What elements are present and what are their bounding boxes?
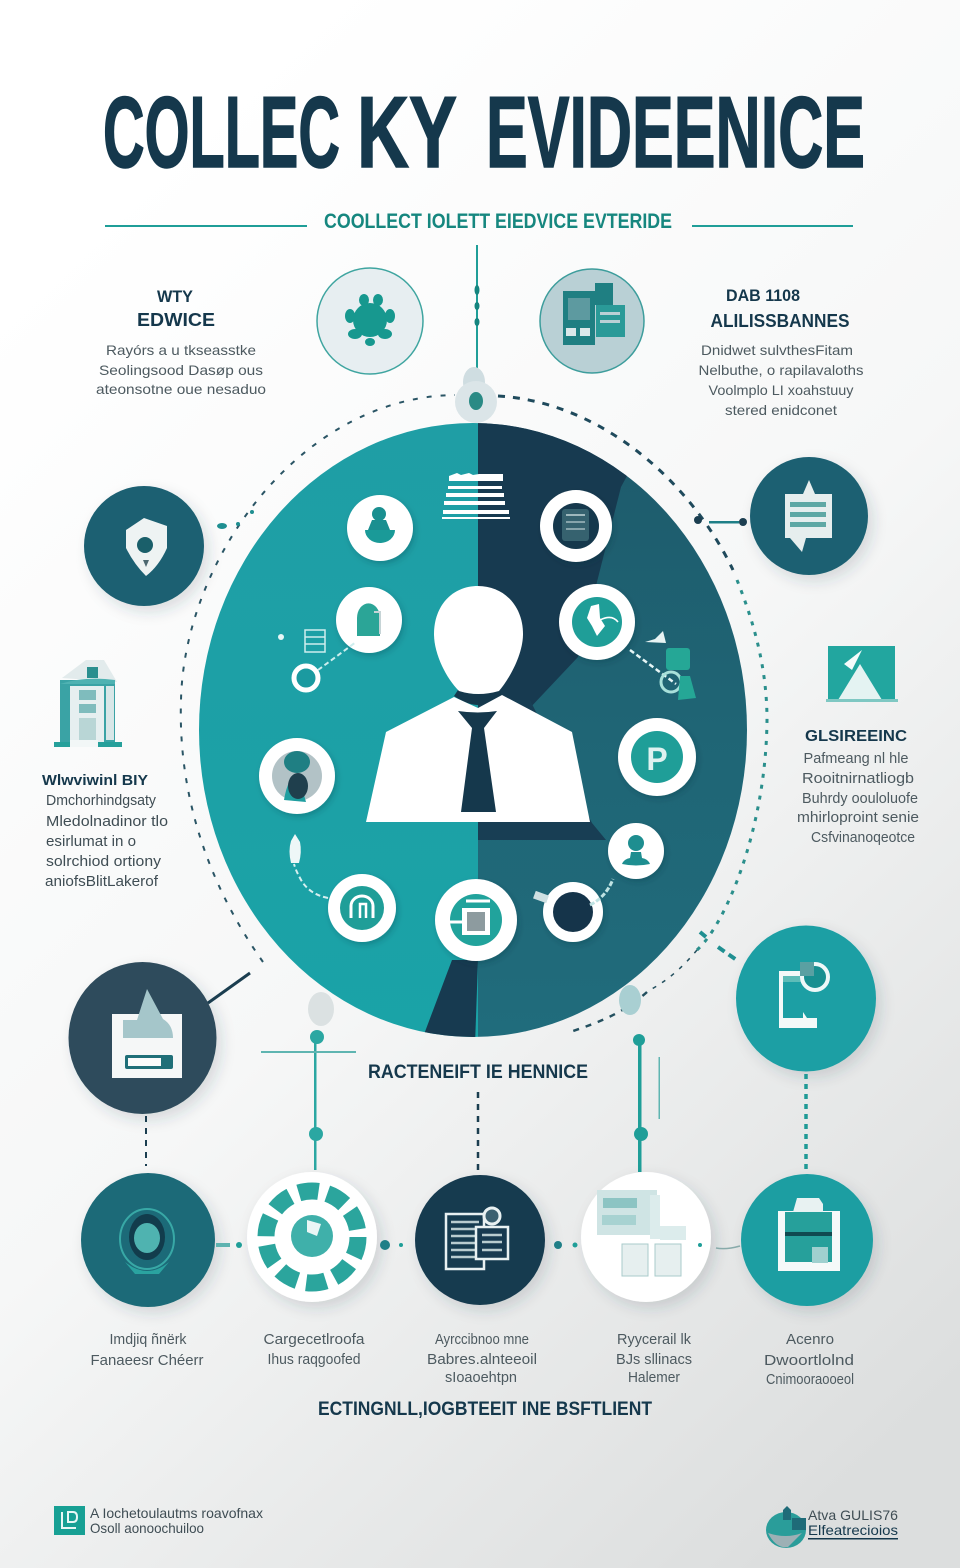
inner icon: chip badge [435, 879, 517, 961]
title [103, 77, 865, 189]
text block: left evidence: solrchiod ortiony [46, 853, 162, 870]
inner icon: crest badge [618, 718, 696, 796]
process labels: Ayrccibnoo mne [435, 1331, 529, 1348]
text block: right gathering: Buhrdy oouloluofe [802, 791, 918, 807]
dashed orbit ring [181, 395, 767, 1031]
process labels: Cargecetlroofa [264, 1331, 365, 1348]
text block: left evidence: Dmchorhindgsaty [46, 792, 156, 809]
process labels: Ihus raqgoofed [268, 1351, 360, 1368]
connector: bottom-right node to ring [700, 932, 806, 1174]
inner icon: person badge [347, 495, 413, 561]
closing statement: ECTINGNLL,IOGBTEEIT INE BSFTLIENT [318, 1399, 652, 1420]
bottom-left node: tent document [68, 962, 216, 1114]
text block: why evidence: Rayórs a u tkseasstke [106, 342, 256, 358]
connector: right node to ring [694, 516, 747, 526]
text block: right gathering: Csfvinanoqeotce [811, 830, 915, 846]
process node 5: folder [741, 1174, 873, 1306]
text block: why evidence: EDWICE [137, 310, 215, 330]
lower drop pins [308, 985, 641, 1026]
text block: data assessments: ALILISSBANNES [710, 311, 850, 331]
vertical connectors to bottom row [261, 1030, 660, 1176]
footer left: logo and text [54, 1505, 263, 1536]
text block: data assessments: DAB 1108 [726, 286, 800, 305]
footer left: logo and text: Osoll aonoochuiloo [90, 1520, 204, 1536]
left icon: building [54, 660, 122, 747]
process labels: Acenro [786, 1331, 834, 1348]
inner icon: leaf badge [559, 584, 635, 660]
text block: right gathering [797, 728, 919, 846]
inner icon: at badge [290, 834, 396, 942]
process node 3: report [415, 1175, 545, 1305]
inner icon: striped stack [442, 473, 510, 519]
row connectors [216, 1240, 740, 1250]
title: KY [357, 77, 457, 189]
central circle with segments [190, 415, 758, 1045]
connector: bottom-left node to ring [146, 973, 250, 1166]
process labels: Halemer [628, 1369, 680, 1386]
text block: data assessments: Voolmplo LI xoahstuuy [708, 382, 854, 398]
footer right: logo and text: Elfeatrecioios [808, 1522, 898, 1538]
text block: right gathering: Pafmeang nl hle [804, 751, 908, 767]
inner icon: crest badge: P [646, 741, 668, 777]
text block: data assessments: Nelbuthe, o rapilavaloths [698, 362, 864, 378]
text block: left evidence: Mledolnadinor tlo [46, 813, 168, 830]
top icon: cluster [317, 268, 423, 374]
process node 2: globe wheel [247, 1172, 377, 1302]
section heading: practice: RACTENEIFT IE HENNICE [368, 1062, 588, 1083]
inner icon: portrait badge [259, 738, 335, 814]
process labels: Dwoortlolnd [764, 1352, 854, 1369]
footer left: logo and text: A Iochetoulautms roavofnax [90, 1505, 263, 1521]
process labels: Ryycerail lk [617, 1331, 691, 1348]
inner icon: device [540, 490, 612, 562]
inner icon: dark ring linked [533, 879, 613, 942]
text block: left evidence: Wlwviwinl BIY [42, 772, 148, 789]
text block: right gathering: GLSIREEINC [805, 728, 907, 745]
person figure [366, 586, 590, 822]
right icon: flag panel [826, 646, 898, 702]
process labels: BJs sllinacs [616, 1351, 692, 1368]
process labels: sIoaoehtpn [445, 1369, 517, 1386]
text block: why evidence: Seolingsood Dasøp ous [99, 362, 263, 378]
right node: note [750, 457, 868, 575]
connector: left node to ring [217, 510, 254, 529]
text block: why evidence [96, 287, 266, 397]
text block: left evidence: esirlumat in o [46, 833, 136, 850]
footer right: logo and text: Atva GULIS76 [808, 1507, 898, 1523]
text block: right gathering: mhirloproint senie [797, 810, 919, 826]
process labels [90, 1331, 854, 1388]
inner icon: teal tools cluster [630, 631, 696, 700]
process node 4: dashboards [581, 1172, 711, 1302]
process labels: Fanaeesr Chéerr [90, 1352, 204, 1369]
subtitle with rules: COOLLECT IOLETT EIEDVICE EVTERIDE [324, 210, 672, 233]
process labels: Imdjiq ñnërk [110, 1331, 187, 1348]
process labels: Cnimooraooeol [766, 1371, 854, 1388]
inner icon: user badge [608, 823, 664, 879]
left node: shield [84, 486, 204, 606]
text block: why evidence: WTY [157, 287, 194, 306]
bottom-right node: clipboard [736, 926, 876, 1072]
inner icon: arch and linked list [278, 587, 402, 690]
text block: why evidence: ateonsotne oue nesaduo [96, 381, 266, 397]
text block: data assessments: stered enidconet [725, 402, 837, 418]
text block: left evidence: aniofsBlitLakerof [45, 873, 159, 890]
footer right: logo and text [766, 1506, 898, 1548]
title: COLLEC [103, 77, 340, 189]
process labels: Babres.alnteeoil [427, 1351, 537, 1368]
top icon: documents [540, 269, 644, 373]
process node 1: scanner [81, 1173, 215, 1307]
text block: left evidence [42, 772, 168, 890]
vertical connector with pin [455, 245, 497, 423]
text block: right gathering: Rooitnirnatliogb [802, 771, 914, 787]
text block: data assessments [698, 286, 864, 418]
text block: data assessments: Dnidwet sulvthesFitam [701, 342, 853, 358]
